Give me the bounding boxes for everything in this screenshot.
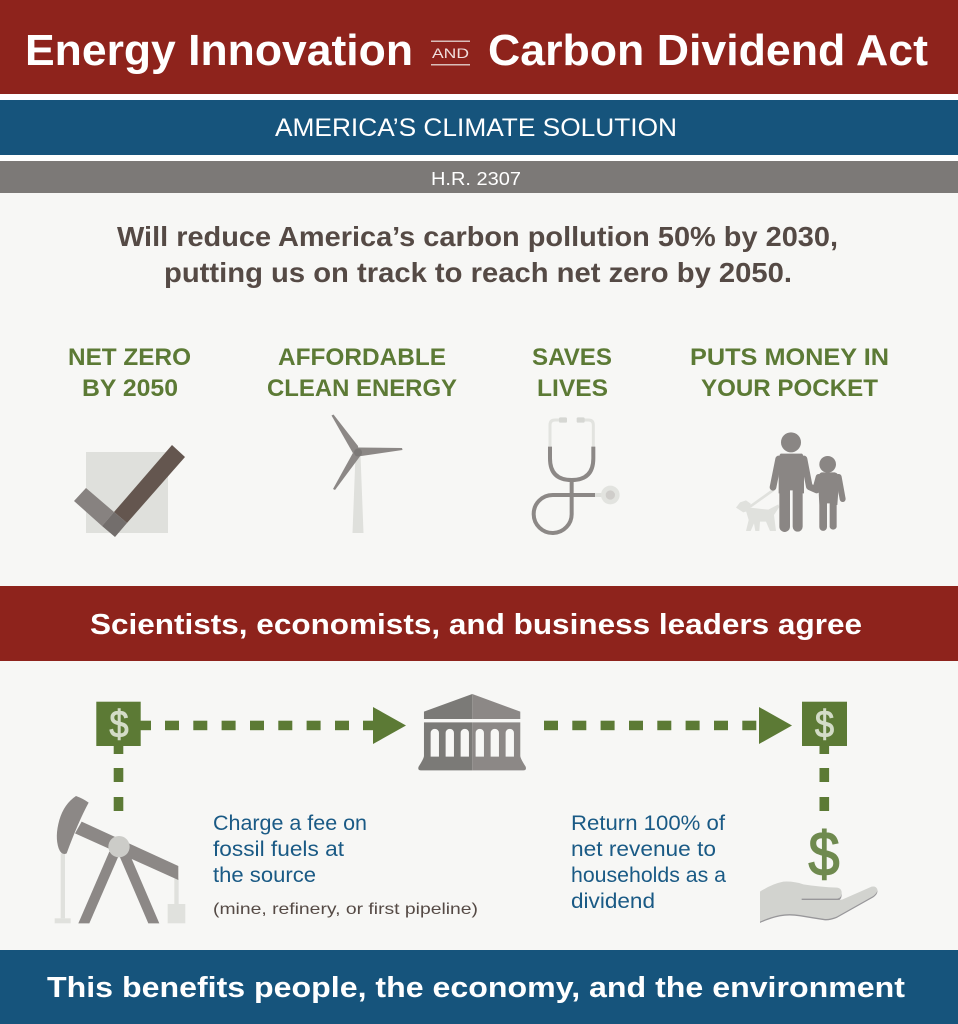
text: fee note: (mine, refinery, or first pipeline) [213,901,478,918]
benefit heading: clean energy: AFFORDABLE [278,344,446,371]
title banner: AND [432,45,469,61]
icon: oil pump jack [55,796,185,923]
benefit heading: net zero: BY 2050 [82,375,178,402]
text: return revenue: net revenue to [571,838,716,861]
icon: source dollar box: $ [109,702,129,745]
arrow: source to treasury [140,707,406,744]
icon: source dollar box [96,702,141,746]
text: return revenue: households as a [571,864,726,887]
section banner: agreement [0,586,958,661]
icon: hand with dollar: $ [808,821,840,889]
arrow: treasury to households [544,707,792,744]
subtitle banner: AMERICA’S CLIMATE SOLUTION [275,114,677,142]
icon: checkmark in box [74,445,185,537]
subtitle banner [0,100,958,155]
benefit heading: net zero: NET ZERO [68,344,191,371]
dog and leash [736,490,779,531]
benefit heading: clean energy [267,344,457,402]
arrow: pump to source box [114,746,123,811]
footer banner: This benefits people, the economy, and the environment [47,972,905,1004]
benefit heading: net zero [68,344,191,402]
footer banner [0,950,958,1024]
text: charge a fee [213,812,367,887]
bill number banner [0,161,958,193]
text: return revenue [571,812,726,913]
text: charge a fee: the source [213,864,316,887]
arrow: box to hand [820,746,829,811]
icon: destination dollar box [802,702,847,746]
benefit heading: money [690,344,889,402]
title banner [0,0,958,94]
headline statement [117,221,838,288]
text: charge a fee: Charge a fee on [213,812,367,835]
child figure [815,456,843,531]
text: charge a fee: fossil fuels at [213,838,344,861]
text: return revenue: Return 100% of [571,812,725,835]
title banner: Energy Innovation [25,26,413,75]
headline statement: Will reduce America’s carbon pollution 50% by 2030, [117,221,838,252]
title banner: Carbon Dividend Act [488,26,928,75]
bill number banner: H.R. 2307 [431,169,521,189]
benefit heading: saves lives: SAVES [532,344,612,371]
headline statement: putting us on track to reach net zero by 2050. [164,257,792,288]
benefit heading: saves lives: LIVES [537,375,608,402]
benefit heading: money: YOUR POCKET [701,375,878,402]
icon: destination dollar box: $ [815,702,834,745]
benefit heading: money: PUTS MONEY IN [690,344,889,371]
benefit heading: clean energy: CLEAN ENERGY [267,375,457,402]
icon: hand with dollar [760,821,877,923]
icon: capitol building [418,694,526,770]
icon: family with dog [736,432,843,532]
benefit heading: saves lives [532,344,612,402]
icon: stethoscope [534,417,620,533]
adult figure [773,432,817,532]
text: return revenue: dividend [571,890,655,913]
section banner: agreement: Scientists, economists, and business leaders agree [90,609,862,641]
icon: wind turbine [332,414,402,533]
